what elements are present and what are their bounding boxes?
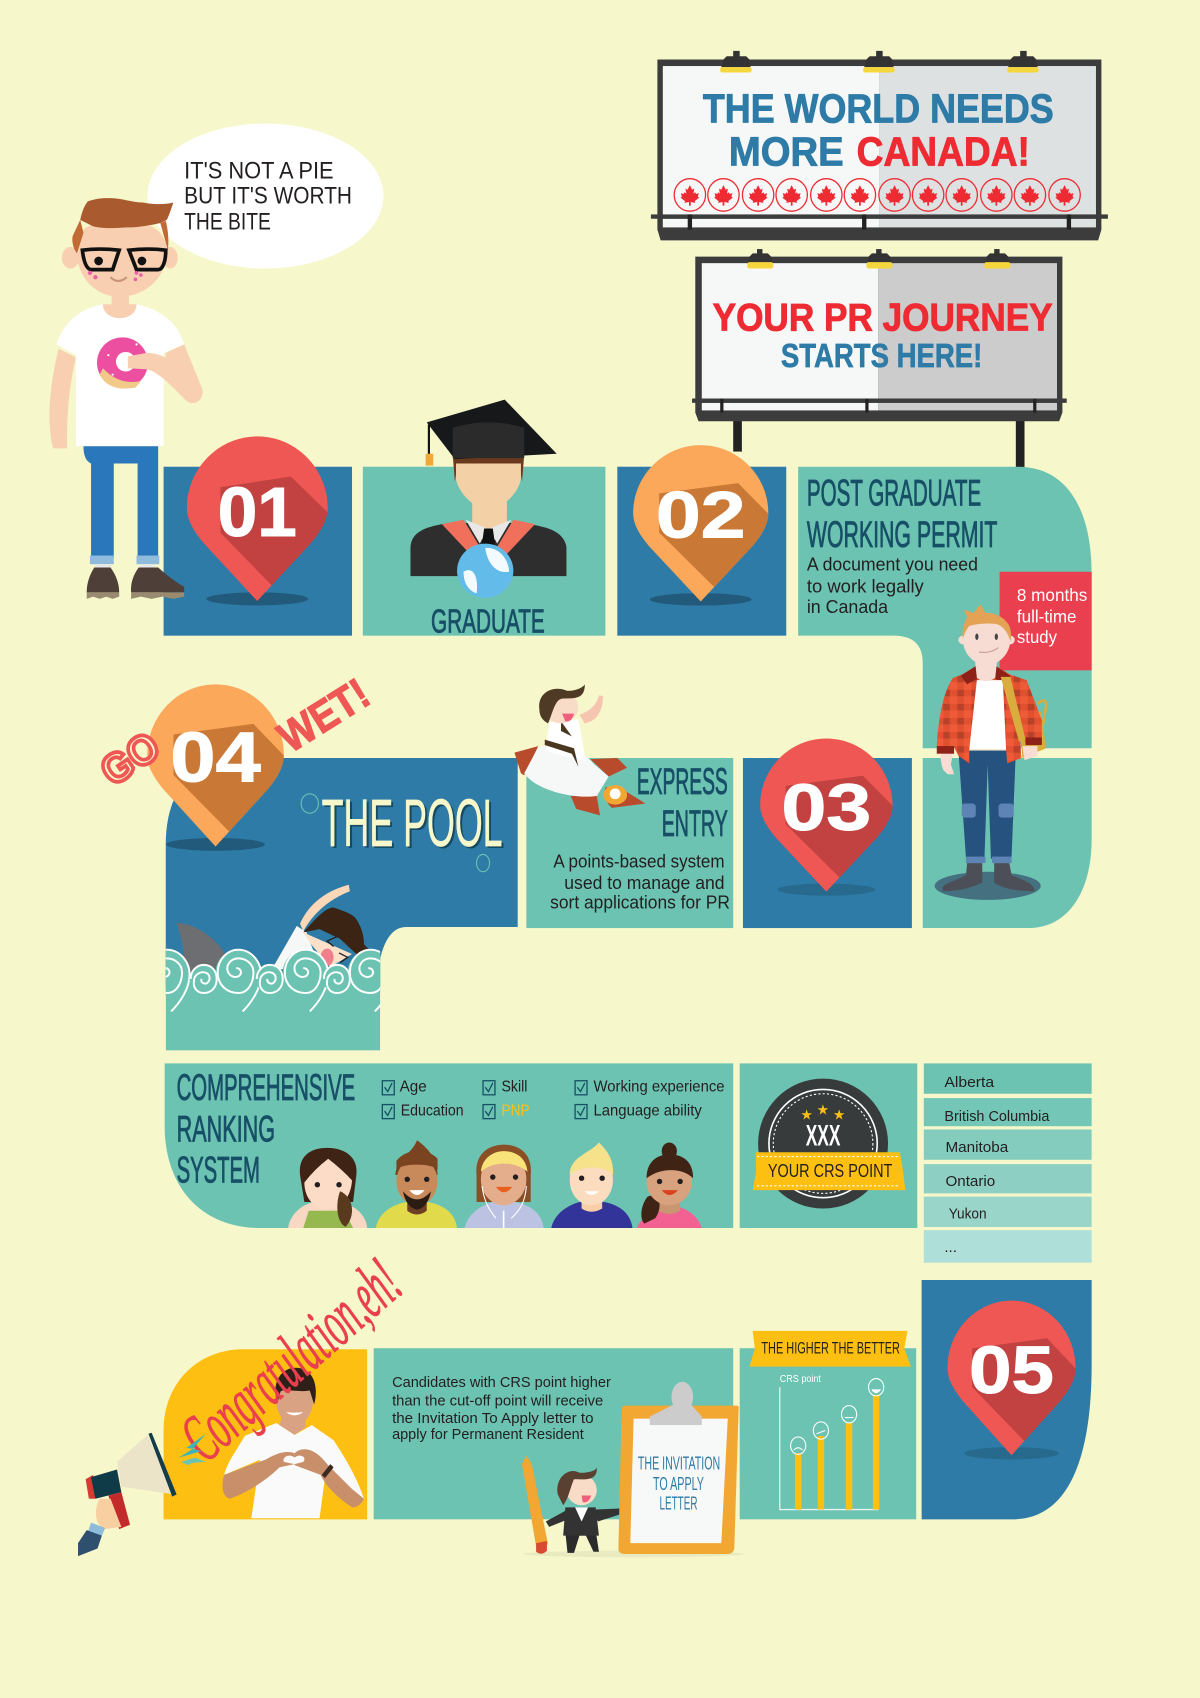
axis label: CRS point (780, 1374, 821, 1385)
post graduate heading: WORKING PERMIT (807, 514, 997, 555)
express entry description: sort applications for PR (550, 892, 730, 913)
crs point badge (753, 1079, 905, 1209)
hair (275, 1368, 316, 1405)
swimmer torso (272, 926, 325, 969)
sleeve (78, 1530, 102, 1556)
bubble text: IT'S NOT A PIE (184, 158, 334, 185)
side hair (72, 220, 168, 253)
rider tie and belt (545, 721, 578, 767)
step 03 panel (743, 758, 912, 928)
ribbon (749, 1331, 911, 1367)
nerd character (49, 198, 203, 599)
post graduate heading (807, 473, 997, 555)
study duration callout text: full-time (1017, 607, 1077, 627)
swimmer cheek (321, 949, 334, 966)
shirt cuffs (937, 737, 1042, 754)
province names: British Columbia (944, 1108, 1050, 1125)
rocket fins (571, 758, 627, 815)
express entry panel (526, 758, 733, 928)
shark fin (177, 923, 230, 975)
hair (963, 604, 1011, 641)
megaphone rim (148, 1433, 177, 1497)
criteria checklist: Skill (501, 1079, 527, 1096)
face (456, 463, 521, 510)
invitation letter text: LETTER (660, 1493, 697, 1514)
stars: ★ (833, 1107, 845, 1123)
row of maple leaf circles (674, 179, 1080, 211)
post graduate description: to work legally (807, 575, 925, 596)
globe (457, 544, 513, 598)
invitation letter text: TO APPLY (653, 1473, 704, 1494)
shoes (87, 567, 184, 599)
strap (1001, 677, 1026, 742)
rocket body (524, 746, 609, 797)
knee patches (962, 804, 1014, 818)
watch (322, 1464, 334, 1478)
ground shadow under businessman and clipboard (523, 1551, 744, 1557)
pin 03: 03 (782, 771, 871, 844)
swimmer closed eyes (327, 937, 348, 963)
headline starts here: STARTS HERE! (781, 338, 982, 375)
lamp middle (866, 249, 892, 269)
billboard headline canada: CANADA! (857, 129, 1030, 175)
neck (472, 500, 507, 547)
mortarboard (427, 400, 557, 459)
right forearm (295, 1449, 364, 1507)
billboard: your pr journey starts here (692, 249, 1067, 468)
express entry description: used to manage and (564, 872, 725, 893)
businessman (546, 1467, 622, 1553)
swimmer arm (300, 885, 350, 931)
the pool panel (166, 758, 518, 985)
ribbon text: THE HIGHER THE BETTER (761, 1340, 900, 1358)
jeans cuffs (966, 857, 1012, 863)
pin 05: 05 (969, 1333, 1054, 1408)
hand (96, 1499, 121, 1529)
comprehensive ranking system heading: RANKING (177, 1108, 275, 1149)
arms (546, 1508, 622, 1527)
backpack (1019, 708, 1046, 758)
cap band (453, 422, 524, 458)
criteria checklist: Language ability (594, 1102, 702, 1119)
white tee (969, 680, 1006, 749)
wet text: WET! (270, 670, 378, 762)
applicant 4 (551, 1142, 632, 1228)
criteria checklist (382, 1079, 725, 1119)
shirt and tie (575, 1507, 588, 1521)
rocket with rider (514, 684, 645, 815)
post graduate heading: POST GRADUATE (807, 473, 981, 514)
hair quiff (80, 198, 173, 228)
ribbon label: YOUR CRS POINT (768, 1160, 892, 1181)
student lower panel (923, 758, 1092, 928)
bubble text: THE BITE (184, 209, 271, 236)
comprehensive ranking system heading (177, 1067, 355, 1191)
candidates description (392, 1374, 611, 1443)
eyes (94, 257, 146, 265)
lamp right (984, 249, 1010, 269)
lamp left (747, 249, 773, 269)
pin 05 (947, 1300, 1076, 1460)
express entry heading (637, 761, 728, 844)
face (77, 221, 167, 297)
step 01 panel (164, 467, 352, 636)
swimmer hair (303, 907, 369, 954)
lamp right (1007, 51, 1039, 73)
pin 02 (633, 445, 768, 606)
invitation letter text (638, 1453, 720, 1514)
neck (103, 290, 137, 318)
province names: Manitoba (945, 1139, 1009, 1156)
graduate panel (363, 467, 605, 636)
megaphone red band (86, 1475, 95, 1499)
step 05 panel (922, 1280, 1092, 1519)
candidates description: apply for Permanent Resident (392, 1426, 585, 1443)
stars: ★ (800, 1107, 813, 1123)
smile (286, 1412, 303, 1415)
raised arm (579, 695, 603, 723)
applicant 5 (637, 1142, 702, 1228)
province list (924, 1063, 1092, 1263)
rider smile (562, 714, 574, 721)
left hand (941, 753, 954, 774)
go text: GO (92, 723, 168, 795)
candidates panel (374, 1348, 733, 1519)
jeans (83, 446, 158, 558)
criteria checklist: Age (400, 1079, 427, 1096)
criteria checklist: Education (401, 1102, 464, 1119)
headline your pr journey: YOUR PR JOURNEY (713, 296, 1053, 339)
province names: ... (944, 1239, 957, 1256)
bag handle (1037, 701, 1046, 731)
invitation letter text: THE INVITATION (638, 1453, 720, 1474)
congratulation script: Congratulation,eh! (165, 1243, 416, 1475)
pin 01: 01 (218, 473, 297, 551)
man making a heart (223, 1368, 364, 1518)
graduate figure (410, 400, 566, 598)
collar and tie (466, 520, 511, 544)
collar (961, 665, 1010, 684)
cuffs (90, 556, 159, 564)
plaid shirt (937, 665, 1042, 763)
clip (650, 1382, 702, 1425)
criteria checklist: PNP (501, 1102, 530, 1119)
bubble text (184, 158, 352, 236)
express entry description: A points-based system (553, 850, 725, 871)
ears (958, 636, 1015, 644)
comprehensive ranking panel (165, 1063, 733, 1228)
stars: ★ (817, 1101, 829, 1117)
hair (453, 455, 524, 482)
ribbon (753, 1152, 905, 1190)
the pool title (322, 786, 505, 863)
boots (942, 863, 1034, 891)
pin 03 (760, 738, 892, 896)
smileys (791, 1379, 884, 1454)
province names: Yukon (949, 1205, 987, 1222)
jeans (958, 750, 1016, 859)
stole (442, 520, 535, 561)
five applicants (288, 1140, 702, 1228)
right arm (128, 344, 203, 403)
higher the better chart (749, 1331, 911, 1510)
neck (279, 1413, 305, 1435)
candidates description: the Invitation To Apply letter to (392, 1410, 594, 1427)
study duration callout text: 8 months (1017, 585, 1087, 605)
applicant 1 (288, 1148, 367, 1228)
hair (557, 1467, 597, 1505)
invitation clipboard (618, 1382, 739, 1554)
eyes and mouth (975, 634, 999, 652)
comprehensive ranking system heading: COMPREHENSIVE (177, 1067, 355, 1108)
stars (800, 1101, 845, 1123)
province names: Ontario (945, 1173, 995, 1190)
gown (410, 523, 566, 576)
bars (795, 1395, 879, 1510)
applicant 3 (465, 1145, 544, 1228)
rider torso (546, 719, 586, 761)
tassel (426, 424, 433, 466)
comprehensive ranking system heading: SYSTEM (177, 1150, 260, 1191)
sleeve cuff (88, 1523, 105, 1536)
white shirt (224, 1423, 364, 1518)
billboard: the world needs more canada (651, 51, 1108, 240)
express entry heading: ENTRY (662, 803, 728, 844)
post graduate description (807, 554, 978, 617)
face (276, 1375, 313, 1425)
candidates description: than the cut-off point will receive (392, 1393, 603, 1410)
step 02 panel (617, 467, 786, 636)
megaphone body (91, 1470, 121, 1499)
waves (166, 948, 380, 1050)
post graduate description: A document you need (807, 554, 978, 575)
neck (975, 657, 997, 681)
face (963, 613, 1010, 665)
post graduate working permit panel (798, 467, 1092, 748)
province names (944, 1074, 1050, 1256)
billboard headline line 2: MORE (729, 129, 844, 175)
megaphone horn (117, 1435, 174, 1494)
express entry description (550, 850, 730, 913)
jacket (563, 1507, 599, 1536)
ground shadow (935, 872, 1041, 900)
pin 02: 02 (656, 479, 745, 553)
axes (780, 1387, 878, 1510)
right hand (1022, 746, 1037, 760)
ears (62, 247, 178, 269)
student character (935, 604, 1046, 900)
water bubbles (301, 794, 490, 872)
lamp left (720, 51, 752, 73)
post graduate description: in Canada (807, 596, 889, 617)
graduate label: GRADUATE (431, 603, 545, 640)
freckles and smile (88, 271, 143, 281)
billboard headline line 1: THE WORLD NEEDS (703, 85, 1054, 131)
swimmer and shark (177, 885, 369, 975)
t-shirt (56, 304, 184, 446)
bubble text: BUT IT'S WORTH (184, 183, 352, 210)
socks (95, 564, 155, 573)
province names: Alberta (944, 1074, 995, 1091)
pin 04: 04 (170, 718, 261, 797)
score placeholder: XXX (806, 1121, 841, 1153)
lamp middle (863, 51, 895, 73)
sound bolts (179, 1434, 206, 1465)
rocket flame window (603, 785, 645, 808)
pencil (522, 1455, 548, 1554)
red callout panel (1000, 572, 1092, 670)
pin 04 (147, 684, 284, 851)
crs point panel (740, 1063, 917, 1228)
megaphone (78, 1433, 206, 1556)
face (566, 1475, 597, 1505)
megaphone handle (108, 1492, 130, 1529)
candidates description: Candidates with CRS point higher (392, 1374, 611, 1391)
rider hair (539, 684, 585, 723)
left arm (49, 349, 76, 448)
express entry heading: EXPRESS (637, 761, 728, 802)
study duration callout text: study (1017, 627, 1057, 647)
higher the better panel (740, 1348, 916, 1519)
criteria checklist: Working experience (594, 1079, 725, 1096)
the pool title: THE POOL (322, 786, 503, 861)
the pool title: THE POOL (324, 788, 505, 863)
rocket nose (514, 746, 538, 775)
smile (582, 1495, 591, 1502)
donut (97, 337, 148, 389)
rider face (544, 691, 578, 723)
pin 01 (186, 436, 328, 606)
legs (565, 1530, 599, 1553)
speech bubble (147, 123, 383, 269)
swimmer face (303, 932, 352, 967)
applicant 2 (376, 1140, 457, 1228)
glasses (82, 249, 166, 270)
study duration callout text (1017, 585, 1087, 647)
heart gap (283, 1456, 304, 1464)
congratulation yellow panel (164, 1349, 367, 1519)
left forearm (223, 1452, 295, 1499)
